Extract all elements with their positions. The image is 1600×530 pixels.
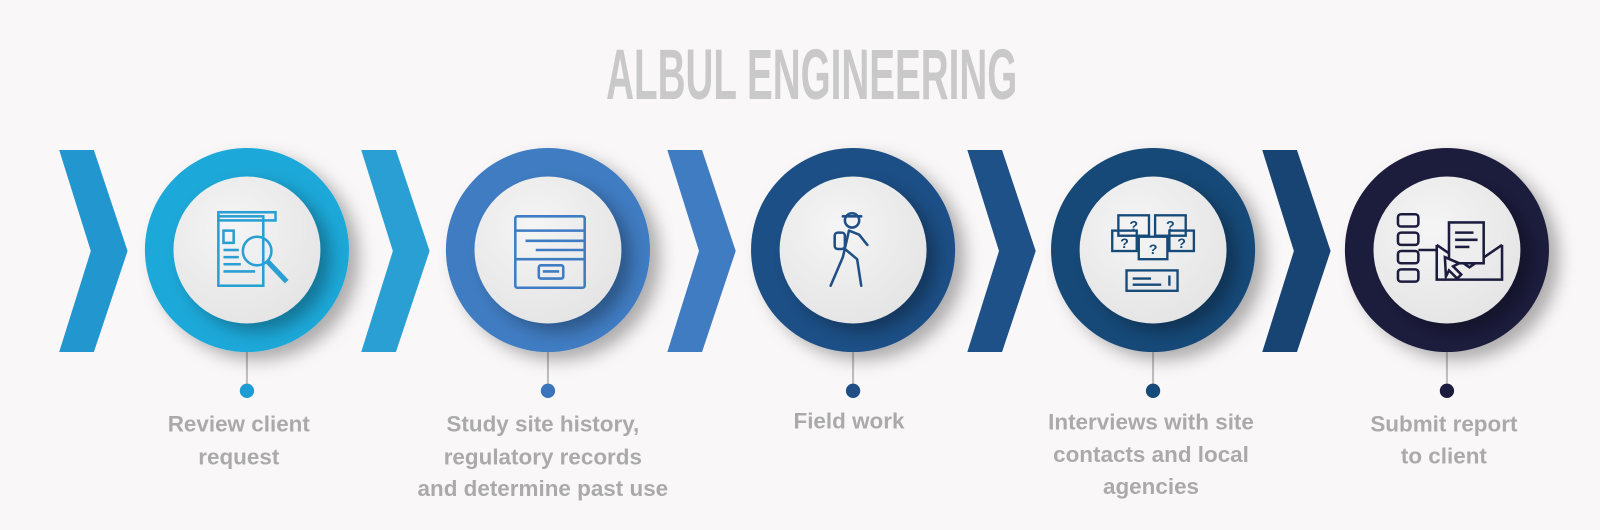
icon: hiker — [831, 213, 867, 286]
arrow: chevron 4 — [967, 150, 1036, 352]
step 5: submit report: Submit report — [1370, 412, 1518, 437]
step 1: review client request: request — [198, 444, 280, 469]
title: ALBUL ENGINEERING — [606, 35, 1017, 115]
step 2: study site history: and determine past use — [418, 476, 668, 501]
arrow: chevron 5 — [1262, 150, 1331, 352]
step 4: interviews: ? — [1177, 236, 1186, 252]
step 3: field work — [751, 148, 955, 434]
step 2: study site history: regulatory records — [444, 444, 642, 469]
step 5: submit report — [1345, 148, 1549, 468]
step 1: review client request — [145, 148, 349, 469]
step 4: interviews: Interviews with site — [1048, 410, 1254, 435]
step 4: interviews: contacts and local — [1053, 442, 1249, 467]
icon: document with magnifier — [218, 212, 287, 286]
step 4: interviews: ? — [1166, 219, 1175, 235]
step 3: field work: Field work — [793, 409, 905, 434]
arrow: chevron 2 — [361, 150, 430, 352]
step 4: interviews: ? — [1129, 219, 1138, 235]
step 4: interviews: ? — [1120, 236, 1129, 252]
icon: question bubbles — [1112, 215, 1194, 291]
arrow: chevron 1 — [59, 150, 128, 352]
step 2: study site history: Study site history, — [446, 412, 639, 437]
step 5: submit report: to client — [1401, 443, 1487, 468]
arrow: chevron 3 — [667, 150, 736, 352]
step 4: interviews: agencies — [1103, 474, 1199, 499]
icon: file cabinet — [515, 216, 585, 288]
step 4: interviews — [1048, 148, 1255, 499]
step 1: review client request: Review client — [168, 412, 310, 437]
step 4: interviews: ? — [1149, 242, 1157, 258]
icon: database and envelope — [1398, 214, 1502, 282]
step 2: study site history — [418, 148, 668, 501]
